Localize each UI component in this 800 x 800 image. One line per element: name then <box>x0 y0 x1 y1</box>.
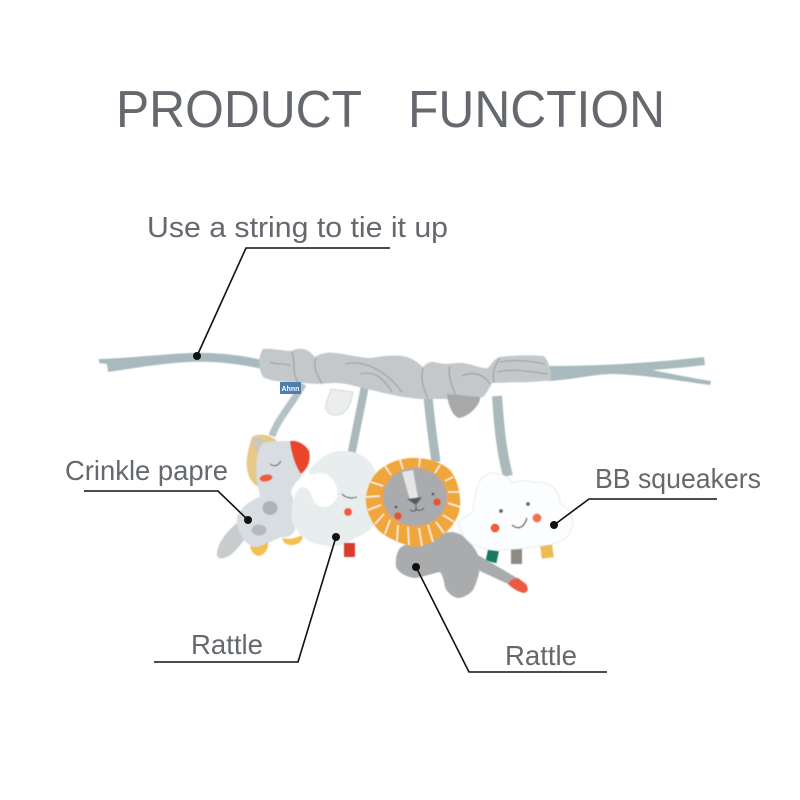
toy: moon <box>292 451 378 546</box>
label: crinkle paper: Crinkle papre <box>65 455 228 486</box>
toy: string ties <box>99 353 711 385</box>
toy: blue label <box>280 382 301 394</box>
toy: lion head <box>366 458 460 547</box>
callout: rattle left leader <box>154 533 340 662</box>
title: PRODUCT <box>116 81 362 139</box>
toy: tag loop white <box>326 389 353 415</box>
toy: cloud <box>458 473 573 550</box>
toy: cloud tags <box>486 543 554 564</box>
callout: crinkle leader <box>84 491 252 524</box>
toy: crinkled band <box>259 349 551 400</box>
toy: tag loop grey <box>447 394 480 418</box>
toy: moon tag <box>344 543 355 557</box>
title: FUNCTION <box>408 81 665 139</box>
callout: string leader <box>193 248 390 360</box>
toy: hanging ribbons <box>272 384 508 476</box>
label: rattle right: Rattle <box>505 640 577 671</box>
toy: zebra <box>217 435 310 558</box>
callout: squeakers leader <box>550 499 717 529</box>
label: string: Use a string to tie it up <box>147 212 448 244</box>
label: rattle left: Rattle <box>191 629 263 660</box>
toy: blue label: Ahnn <box>282 386 299 393</box>
callout: rattle right leader <box>412 563 607 672</box>
title <box>116 81 665 139</box>
toy: lion body <box>396 532 528 598</box>
label: squeakers: BB squeakers <box>595 463 761 494</box>
